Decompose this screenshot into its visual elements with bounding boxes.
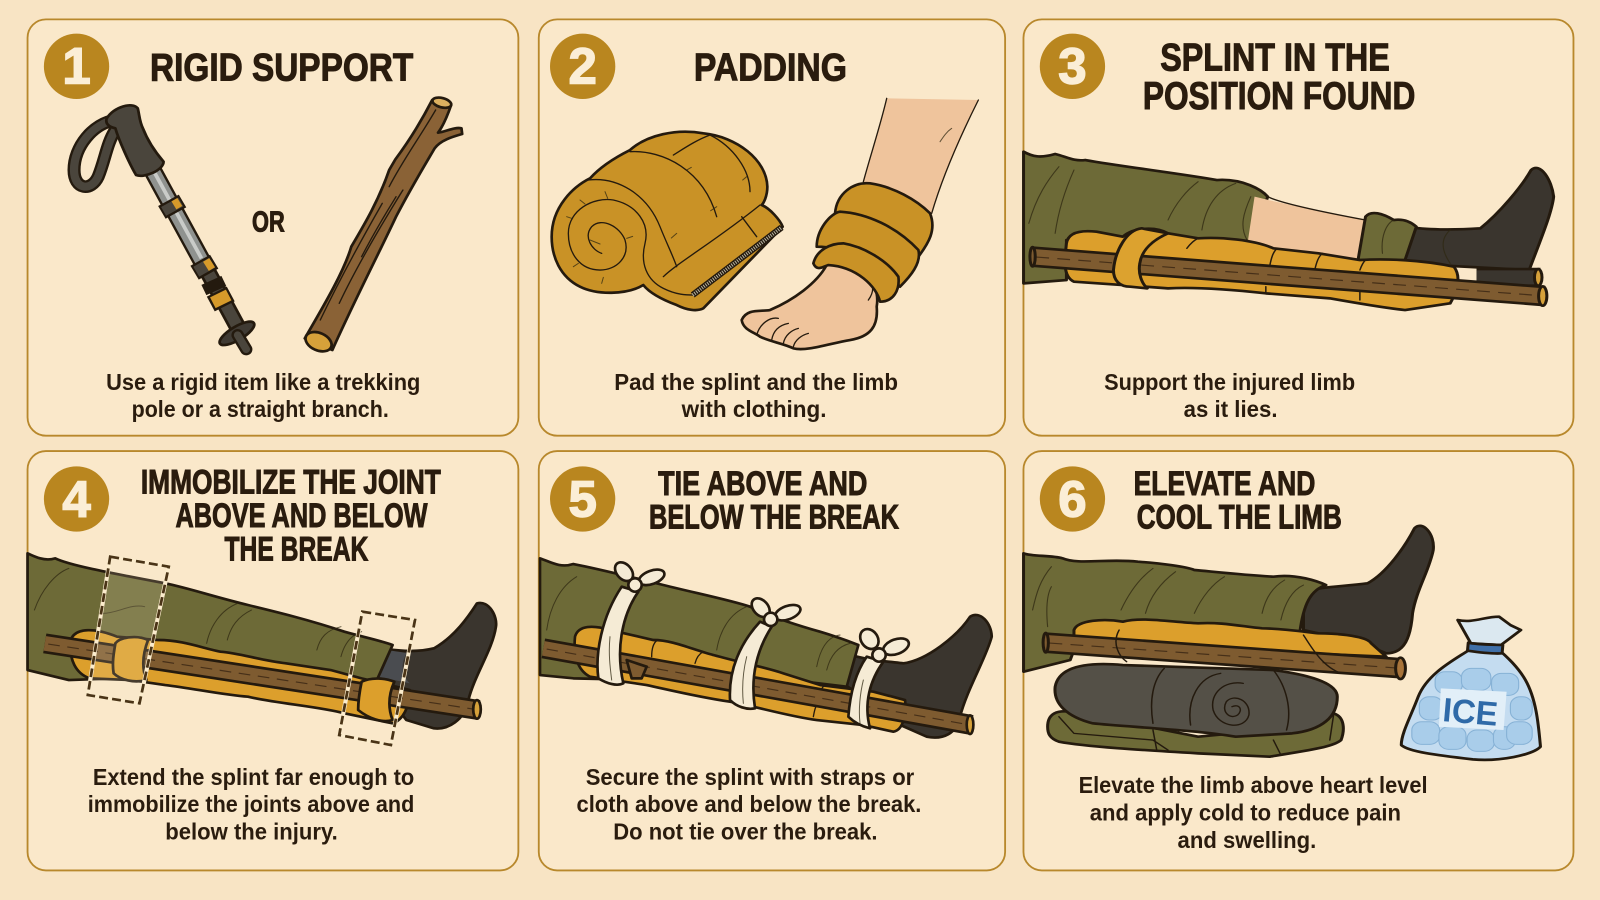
callout: dashed joint markers	[88, 557, 415, 745]
panel: step 6 elevate and cool	[1023, 451, 1573, 870]
icon: straight branch	[302, 96, 462, 355]
step 4 heading: THE BREAK	[224, 531, 368, 569]
icon: ice bag	[1401, 617, 1540, 760]
step 5 badge	[550, 466, 615, 532]
icon: trekking pole	[74, 105, 258, 349]
step 6 heading: ELEVATE AND	[1134, 465, 1315, 503]
icon: rolled sleeping bag	[552, 132, 783, 310]
step 5 badge: 5	[568, 470, 597, 527]
step 5 description	[577, 764, 921, 844]
step 3 heading: POSITION FOUND	[1143, 75, 1415, 118]
step 4 badge	[44, 466, 109, 532]
step 6 badge	[1040, 466, 1105, 532]
step 6 description: Elevate the limb above heart level	[1079, 772, 1428, 798]
illustration: leg tied with straps	[540, 558, 992, 738]
illustration: leg with joints marked	[28, 553, 496, 729]
step 6 description: and swelling.	[1178, 827, 1316, 853]
step 6 badge: 6	[1058, 470, 1087, 527]
step 1 description: Use a rigid item like a trekking	[106, 369, 420, 395]
step 5 description: cloth above and below the break.	[577, 791, 921, 817]
panel: step 2 padding	[539, 19, 1005, 436]
icon: ice bag: ICE	[1441, 692, 1499, 734]
label: or: OR	[252, 207, 285, 239]
step 3 description: Support the injured limb	[1104, 369, 1355, 395]
step 1 heading: RIGID SUPPORT	[150, 47, 414, 90]
step 5 heading: BELOW THE BREAK	[649, 499, 899, 537]
panel: step 3 splint in position found	[1023, 19, 1573, 436]
step 6 description: and apply cold to reduce pain	[1090, 799, 1401, 825]
illustration: splinted leg lying flat	[1024, 152, 1554, 310]
step 2 badge: 2	[568, 38, 597, 95]
step 2 badge	[550, 34, 615, 99]
step 4 heading	[141, 463, 441, 569]
strap ties	[598, 559, 911, 728]
icon: padded ankle and foot	[742, 98, 978, 349]
step 4 badge: 4	[62, 470, 91, 527]
step 3 badge: 3	[1058, 38, 1087, 95]
panel: step 4 immobilize joints	[28, 451, 518, 870]
step 3 heading: SPLINT IN THE	[1160, 36, 1390, 79]
step 4 description: Extend the splint far enough to	[93, 764, 414, 790]
step 2 description: Pad the splint and the limb	[614, 369, 898, 395]
step 1 badge	[44, 34, 109, 99]
panel: step 1 rigid support	[28, 19, 518, 436]
step 2 description: with clothing.	[681, 396, 827, 422]
step 4 description: below the injury.	[165, 818, 338, 844]
step 4 heading: IMMOBILIZE THE JOINT	[141, 463, 441, 501]
step 4 description	[88, 764, 414, 844]
step 1 badge: 1	[62, 38, 91, 95]
panel: step 5 tie above and below	[539, 451, 1005, 870]
step 6 heading	[1134, 465, 1342, 537]
step 6 description	[1079, 772, 1428, 853]
step 6 heading: COOL THE LIMB	[1137, 499, 1342, 537]
step 5 heading	[649, 465, 899, 537]
step 5 heading: TIE ABOVE AND	[658, 465, 867, 503]
step 3 description	[1104, 369, 1355, 422]
step 3 description: as it lies.	[1184, 396, 1278, 422]
step 4 heading: ABOVE AND BELOW	[176, 497, 428, 535]
step 1 description	[106, 369, 420, 422]
step 1 description: pole or a straight branch.	[132, 396, 389, 422]
step 2 heading: PADDING	[694, 47, 847, 90]
illustration: elevated leg on rolled bedding	[1024, 526, 1433, 757]
step 3 badge	[1040, 34, 1105, 99]
step 2 description	[614, 369, 898, 422]
step 5 description: Do not tie over the break.	[613, 818, 878, 844]
step 5 description: Secure the splint with straps or	[586, 764, 914, 790]
step 3 heading	[1143, 36, 1415, 118]
step 4 description: immobilize the joints above and	[88, 791, 414, 817]
